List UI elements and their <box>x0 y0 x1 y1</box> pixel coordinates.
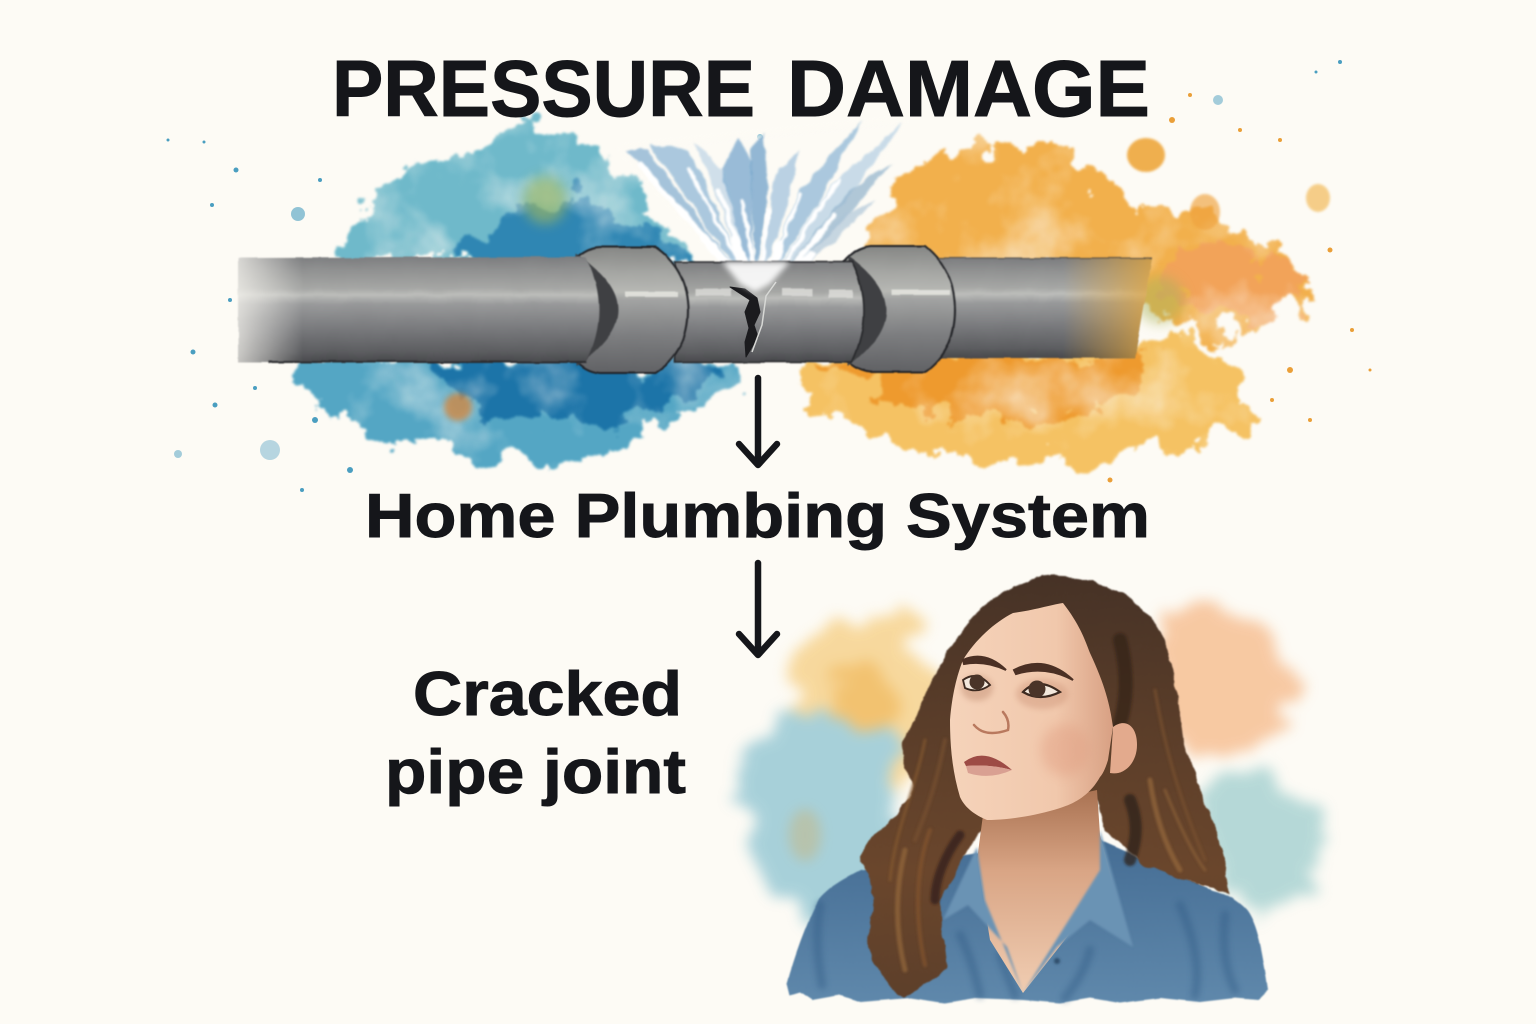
nose <box>974 712 1008 733</box>
label: Cracked pipe joint: pipe joint <box>385 738 686 807</box>
pipe: middle section <box>675 262 864 362</box>
pipe crack <box>730 282 776 357</box>
watercolor splash: orange right <box>805 138 1330 466</box>
label: Cracked pipe joint <box>385 660 686 807</box>
arrow: pipe to home plumbing <box>739 378 777 465</box>
pipe collar left <box>573 247 688 373</box>
paint speckles <box>166 60 1372 492</box>
eyes <box>963 674 1060 698</box>
neck and chest <box>977 790 1112 993</box>
face shading <box>961 675 1089 776</box>
title <box>332 44 1150 133</box>
hair strands <box>890 640 1205 970</box>
pipe collar right <box>843 246 955 372</box>
watercolor splash: blue left <box>290 129 736 462</box>
watercolor splash behind woman <box>735 602 1325 934</box>
pipe: right section <box>930 258 1152 358</box>
ear <box>1110 723 1137 773</box>
label: Cracked pipe joint: Cracked <box>413 660 682 729</box>
title: DAMAGE <box>787 44 1150 133</box>
face <box>950 603 1113 820</box>
mouth <box>964 756 1012 776</box>
eyebrows <box>963 657 1006 670</box>
shirt collar <box>943 830 1133 993</box>
shirt <box>787 840 1268 1003</box>
spray root at crack <box>722 262 790 292</box>
shirt folds <box>817 905 1235 998</box>
arrow: home plumbing to cracked joint <box>739 563 777 655</box>
label: Home Plumbing System: Home Plumbing System <box>365 482 1150 551</box>
woman illustration <box>787 576 1268 1003</box>
hair <box>860 576 1230 997</box>
title: PRESSURE <box>332 44 755 133</box>
pipe: left section <box>238 257 599 362</box>
water spray <box>620 120 905 290</box>
